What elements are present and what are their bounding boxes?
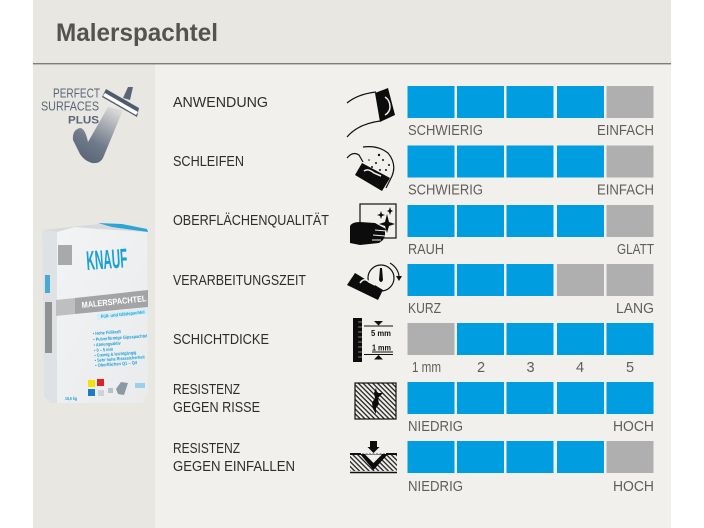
label: OBERFLÄCHENQUALITÄT	[173, 212, 329, 229]
product bag: • 0 – 5 mm	[94, 347, 113, 353]
logo: perfect surfaces plus	[41, 86, 139, 163]
label: SCHLEIFEN	[173, 154, 244, 170]
product bag: • Atmungsaktiv	[94, 341, 121, 347]
scale labels: NIEDRIG	[408, 419, 463, 435]
icon: trowel and stopwatch	[347, 263, 402, 300]
row: Schichtdicke	[173, 318, 654, 376]
product bag: • Oberflächen Q1 – Q4	[95, 360, 138, 368]
scale labels: HOCH	[613, 419, 654, 435]
header band	[33, 0, 671, 64]
row: Resistenz gegen Risse: GEGEN RISSE	[173, 400, 260, 416]
scale labels: RAUH	[408, 242, 444, 258]
label: SCHICHTDICKE	[173, 332, 269, 348]
scale labels: 5	[626, 360, 634, 376]
product bag: • Sehr hohe Rissesicherheit	[95, 354, 145, 363]
scale labels	[412, 360, 634, 376]
icon: layer thickness ruler	[353, 318, 393, 362]
icon: sag	[350, 441, 397, 472]
icon: sanding	[347, 147, 394, 191]
bar scale	[408, 86, 654, 118]
scale labels: LANG	[616, 301, 654, 317]
label: RESISTENZ	[173, 382, 240, 398]
product bag: • Pulverförmige Gipsspachtel	[93, 333, 147, 342]
scale labels: 2	[477, 360, 485, 376]
label: ANWENDUNG	[173, 95, 268, 111]
bar scale	[408, 441, 654, 473]
scale labels: EINFACH	[597, 182, 654, 198]
logo: perfect surfaces plus: SURFACES	[41, 98, 99, 114]
bar scale	[408, 146, 654, 178]
label: VERARBEITUNGSZEIT	[173, 273, 306, 289]
scale labels: GLATT	[617, 242, 654, 258]
row: Schleifen	[173, 146, 654, 198]
row: Resistenz gegen Einfallen	[173, 441, 654, 495]
icon: hand on surface	[350, 204, 396, 245]
product bag: MALERSPACHTEL	[81, 293, 147, 310]
scale labels: SCHWIERIG	[408, 123, 483, 139]
scale labels	[408, 479, 654, 495]
scale labels: NIEDRIG	[408, 479, 463, 495]
row: Resistenz gegen Risse	[173, 382, 654, 435]
product bag	[42, 223, 149, 403]
icon: crack	[355, 383, 396, 419]
bar scale	[408, 264, 654, 296]
product bag: • Cremig & leichtgängig	[94, 350, 137, 358]
scale labels: HOCH	[613, 479, 654, 495]
scale labels: SCHWIERIG	[408, 182, 483, 198]
bar scale	[408, 323, 654, 355]
row: Anwendung	[173, 86, 654, 139]
scale labels	[408, 301, 654, 317]
row: Resistenz gegen Einfallen: GEGEN EINFALLEN	[173, 459, 295, 475]
scale labels	[408, 242, 654, 258]
icon: layer thickness ruler: 5 mm	[371, 328, 391, 338]
bar scale	[408, 205, 654, 237]
logo: perfect surfaces plus: PLUS	[68, 114, 99, 126]
product bag: KNAUF	[85, 243, 128, 276]
product bag: Füll- und Glättspachtel	[101, 309, 145, 319]
row: Verarbeitungszeit	[173, 263, 654, 317]
bar scale	[408, 382, 654, 414]
product bag: 15,5 kg	[65, 396, 77, 401]
logo: perfect surfaces plus: PERFECT	[53, 86, 100, 100]
label: RESISTENZ	[173, 441, 240, 457]
scale labels: 4	[576, 360, 584, 376]
icon: layer thickness ruler: 1 mm	[372, 342, 391, 352]
scale labels: KURZ	[408, 301, 441, 317]
scale labels: 1 mm	[412, 360, 441, 376]
scale labels: EINFACH	[597, 123, 654, 139]
scale labels: 3	[526, 360, 535, 376]
scale labels	[408, 419, 654, 435]
title: Malerspachtel	[56, 19, 218, 47]
icon: trowel application	[347, 88, 395, 137]
scale labels	[408, 123, 654, 139]
left sidebar panel	[33, 64, 155, 528]
row: Oberflächenqualität	[173, 204, 654, 258]
product bag: • Hohe Füllkraft	[93, 329, 121, 336]
scale labels	[408, 182, 654, 198]
